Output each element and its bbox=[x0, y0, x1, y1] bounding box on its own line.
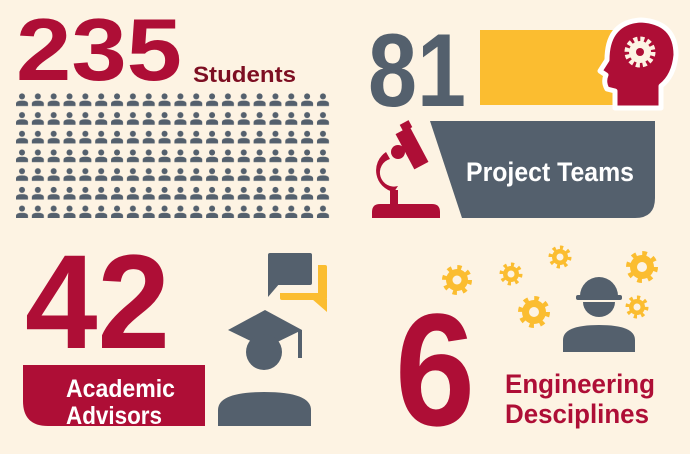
panel: Project Teams bbox=[430, 121, 655, 218]
icon: graduate advisor bbox=[218, 310, 311, 426]
number: 42: 42 bbox=[25, 228, 170, 377]
label: Engineering Desciplines: Desciplines bbox=[505, 399, 649, 429]
icon: microscope bbox=[372, 120, 440, 218]
icon: engineer with hard hat bbox=[563, 277, 635, 352]
label: Engineering Desciplines bbox=[505, 369, 655, 429]
icon: speech bubbles bbox=[268, 253, 327, 312]
icons: gears bbox=[444, 248, 656, 326]
label: Engineering Desciplines: Engineering bbox=[505, 369, 655, 399]
yellow bar bbox=[480, 30, 620, 105]
number: 6: 6 bbox=[395, 280, 475, 454]
banner: Academic Advisors bbox=[23, 365, 205, 430]
number: 81: 81 bbox=[368, 13, 466, 129]
panel: Project Teams: Project Teams bbox=[466, 157, 634, 187]
banner: Academic Advisors: Academic bbox=[66, 375, 175, 403]
people icon grid bbox=[16, 93, 330, 218]
label: Students: Students bbox=[193, 62, 296, 87]
icon: head with gear bbox=[600, 20, 676, 108]
number: 235: 235 bbox=[16, 0, 182, 99]
banner: Academic Advisors: Advisors bbox=[66, 402, 162, 430]
